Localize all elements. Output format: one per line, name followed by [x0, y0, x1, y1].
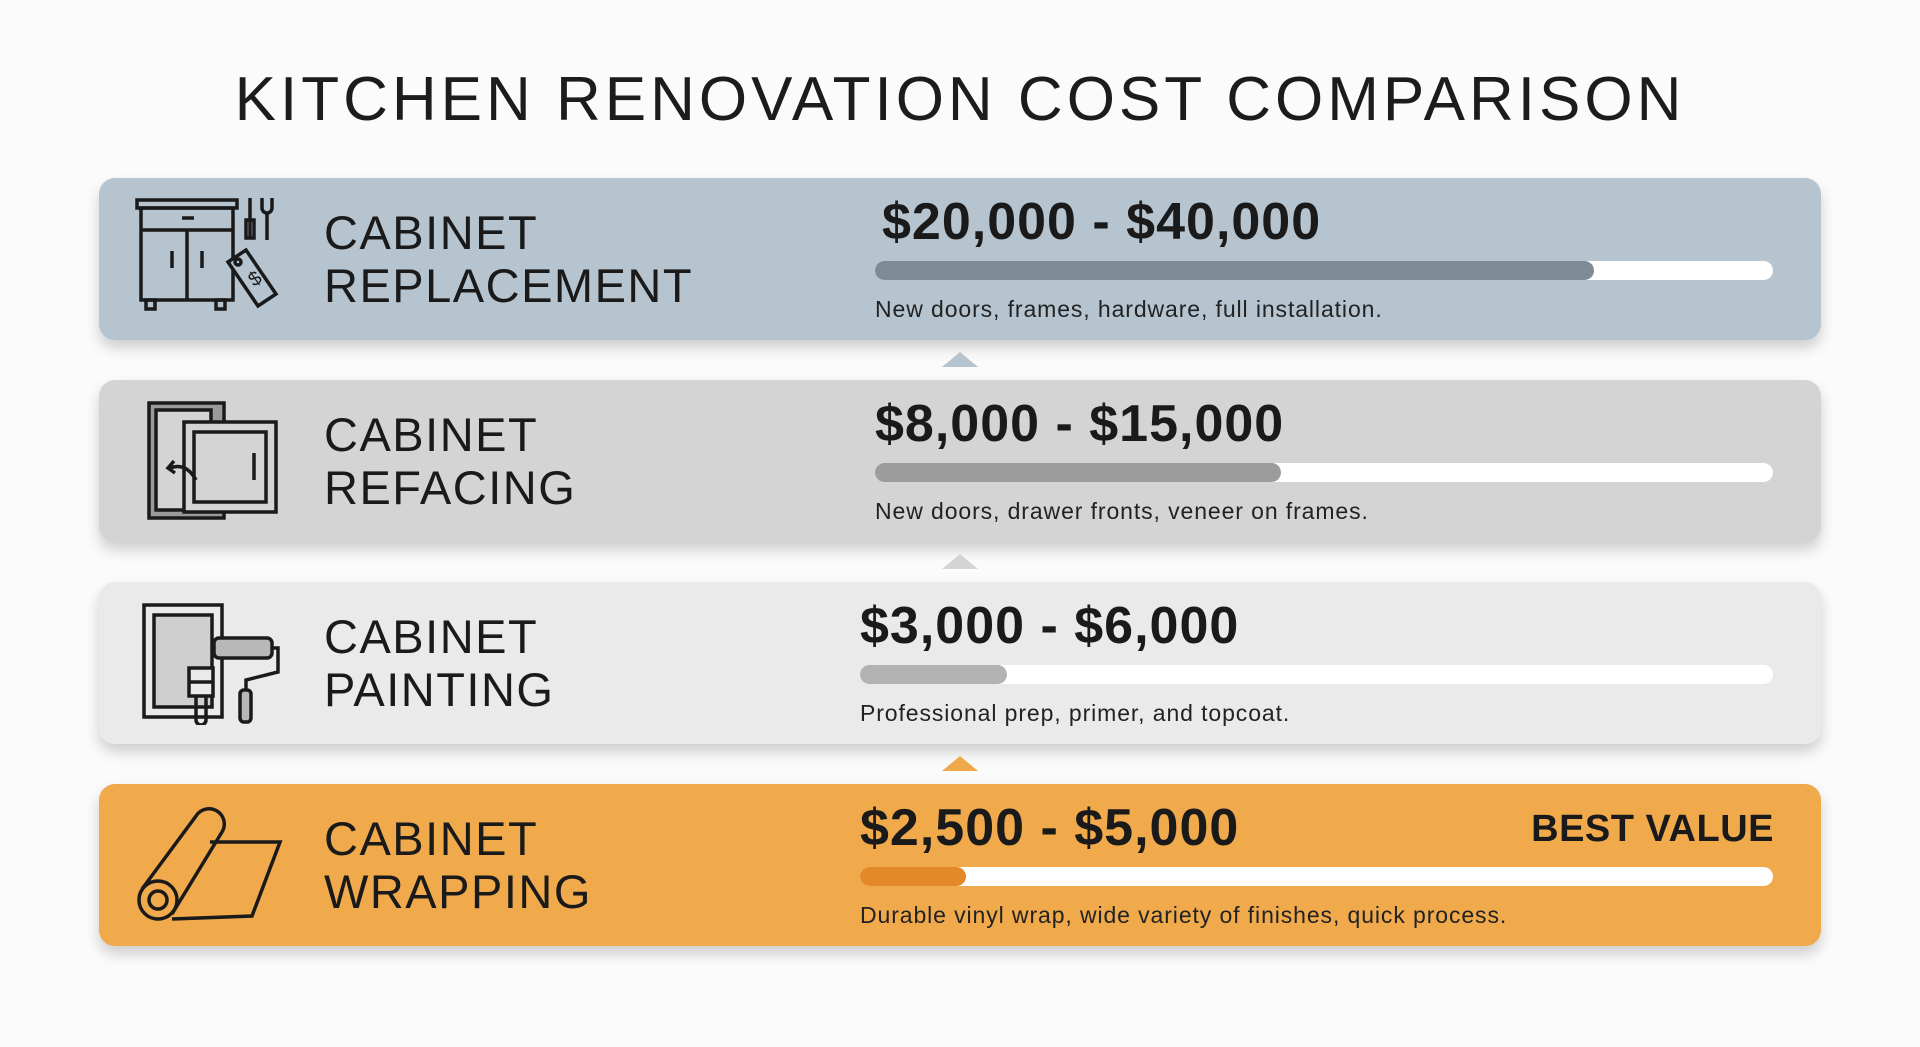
panel: cabinet wrapping: [99, 784, 1821, 946]
bar: [875, 463, 1773, 482]
price: $8,000 - $15,000: [875, 395, 1284, 453]
label: CABINET: [324, 408, 538, 461]
label: REPLACEMENT: [324, 259, 693, 312]
price: $3,000 - $6,000: [860, 597, 1239, 655]
price: $2,500 - $5,000: [860, 799, 1239, 857]
arrow: [942, 554, 978, 569]
description: Durable vinyl wrap, wide variety of finishes, quick process.: [860, 902, 1507, 928]
price: $20,000 - $40,000: [882, 193, 1321, 251]
label: [324, 610, 554, 716]
label: [324, 206, 693, 312]
description: Professional prep, primer, and topcoat.: [860, 700, 1290, 726]
label: [324, 408, 576, 514]
label: WRAPPING: [324, 865, 592, 918]
arrow: [942, 756, 978, 771]
icon: refacing doors: [147, 401, 278, 520]
icon: paint brush and roller: [142, 603, 280, 725]
icon: cabinet with tools and price tag: [135, 198, 278, 311]
panel: cabinet replacement: [99, 178, 1821, 340]
panel: cabinet painting: [99, 582, 1821, 744]
bar: [860, 665, 1773, 684]
description: New doors, drawer fronts, veneer on frames.: [875, 498, 1369, 524]
title: KITCHEN RENOVATION COST COMPARISON: [235, 65, 1685, 134]
icon: vinyl roll: [137, 807, 282, 921]
bar: [875, 261, 1773, 280]
description: New doors, frames, hardware, full installation.: [875, 296, 1383, 322]
icon: cabinet with tools and price tag: $: [244, 267, 266, 291]
bar: [860, 867, 1773, 886]
label: CABINET: [324, 812, 538, 865]
arrow: [942, 352, 978, 367]
label: [324, 812, 592, 918]
label: CABINET: [324, 610, 538, 663]
label: PAINTING: [324, 663, 554, 716]
label: REFACING: [324, 461, 576, 514]
label: CABINET: [324, 206, 538, 259]
panel: cabinet refacing: [99, 380, 1821, 542]
best value badge: BEST VALUE: [1531, 808, 1774, 850]
